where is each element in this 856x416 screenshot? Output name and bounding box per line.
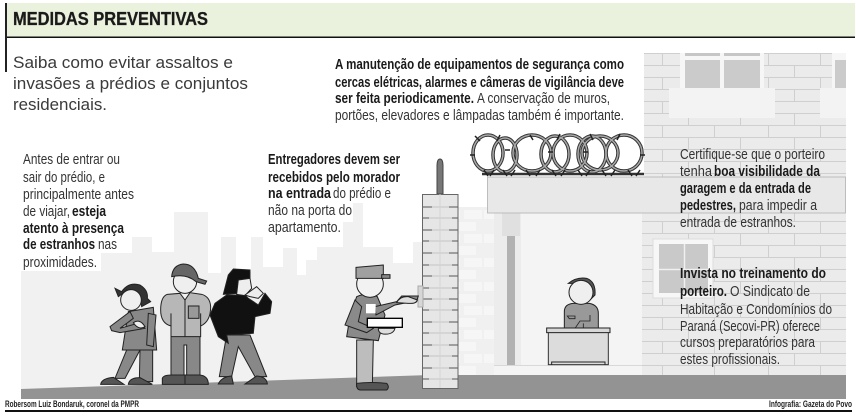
text: doorman visibility: garagem e da entrada de bbox=[680, 181, 811, 197]
text: strangers nearby: de estranhos bbox=[23, 237, 95, 253]
text: doorman training: Invista no treinamento do bbox=[680, 266, 826, 282]
background skyline bbox=[21, 203, 422, 392]
text: doorman training: cursos preparatórios para bbox=[680, 335, 816, 351]
header band bbox=[5, 3, 855, 72]
text: strangers nearby: principalmente antes bbox=[23, 187, 134, 203]
text: doorman visibility bbox=[680, 147, 825, 231]
building upper wall bbox=[644, 53, 846, 177]
back courtyard brick wall bbox=[458, 207, 494, 376]
text: doorman visibility: boa visibilidade da bbox=[714, 164, 821, 180]
text: deliveries: do prédio e bbox=[333, 186, 391, 202]
text: strangers nearby: Antes de entrar ou bbox=[23, 152, 120, 168]
text: deliveries: não na porta do bbox=[268, 203, 352, 219]
text: doorman visibility: para impedir a bbox=[739, 198, 818, 214]
text: strangers nearby bbox=[23, 152, 134, 271]
person: cap bbox=[161, 264, 211, 384]
intro text: residenciais. bbox=[13, 95, 107, 114]
entrance interior bbox=[494, 213, 642, 375]
razor wire bbox=[470, 134, 645, 176]
text: strangers nearby: esteja bbox=[72, 204, 107, 220]
canopy bbox=[488, 177, 846, 213]
text: strangers nearby: sair do prédio, e bbox=[23, 170, 105, 186]
text: deliveries: na entrada bbox=[268, 186, 332, 202]
building lower wall bbox=[642, 213, 846, 375]
text: maintenance: portões, elevadores e lâmpadas também é importante. bbox=[335, 108, 624, 124]
ground bbox=[21, 375, 846, 399]
text: strangers nearby: de viajar, bbox=[23, 204, 70, 220]
text: strangers nearby: proximidades. bbox=[23, 255, 97, 271]
text: maintenance bbox=[335, 57, 624, 124]
upper windows bbox=[669, 53, 846, 118]
text: doorman training: porteiro. bbox=[680, 284, 727, 300]
text: doorman training: Paraná (Secovi-PR) oferece bbox=[680, 319, 820, 335]
lower window bbox=[653, 239, 713, 298]
intro text bbox=[13, 53, 248, 114]
title: MEDIDAS PREVENTIVAS bbox=[13, 9, 208, 29]
intro text: Saiba como evitar assaltos e bbox=[13, 53, 233, 72]
person: black jacket bbox=[210, 269, 272, 384]
text: maintenance: cercas elétricas, alarmes e câmeras de vigilância deve bbox=[335, 75, 624, 91]
text: doorman visibility: tenha bbox=[680, 164, 713, 180]
person: arms crossed bbox=[101, 284, 157, 384]
text: doorman training bbox=[680, 266, 832, 368]
text: doorman training: O Sindicato de bbox=[730, 284, 810, 300]
text: maintenance: ser feita periodicamente. bbox=[335, 91, 474, 107]
intro text: invasões a prédios e conjuntos bbox=[13, 74, 248, 93]
text: doorman visibility: Certifique-se que o porteiro bbox=[680, 147, 825, 163]
delivery man bbox=[345, 265, 418, 390]
text: deliveries: Entregadores devem ser bbox=[268, 152, 400, 168]
doorman at desk bbox=[547, 278, 610, 365]
source credit: Robersom Luiz Bondaruk, coronel da PMPR bbox=[5, 399, 139, 409]
text: deliveries bbox=[268, 152, 400, 236]
text: deliveries: recebidos pelo morador bbox=[268, 170, 400, 186]
text: maintenance: A conservação de muros, bbox=[477, 91, 610, 107]
text: doorman visibility: pedestres, bbox=[680, 198, 736, 214]
text: maintenance: A manutenção de equipamentos de segurança como bbox=[335, 57, 624, 73]
text: deliveries: apartamento. bbox=[268, 220, 341, 236]
pillar bbox=[418, 159, 458, 388]
text: doorman visibility: entrada de estranhos. bbox=[680, 215, 796, 231]
text: strangers nearby: nas bbox=[98, 237, 117, 253]
three people bbox=[101, 264, 272, 384]
text: doorman training: estes profissionais. bbox=[680, 352, 780, 368]
text: strangers nearby: atento à presença bbox=[23, 221, 125, 237]
